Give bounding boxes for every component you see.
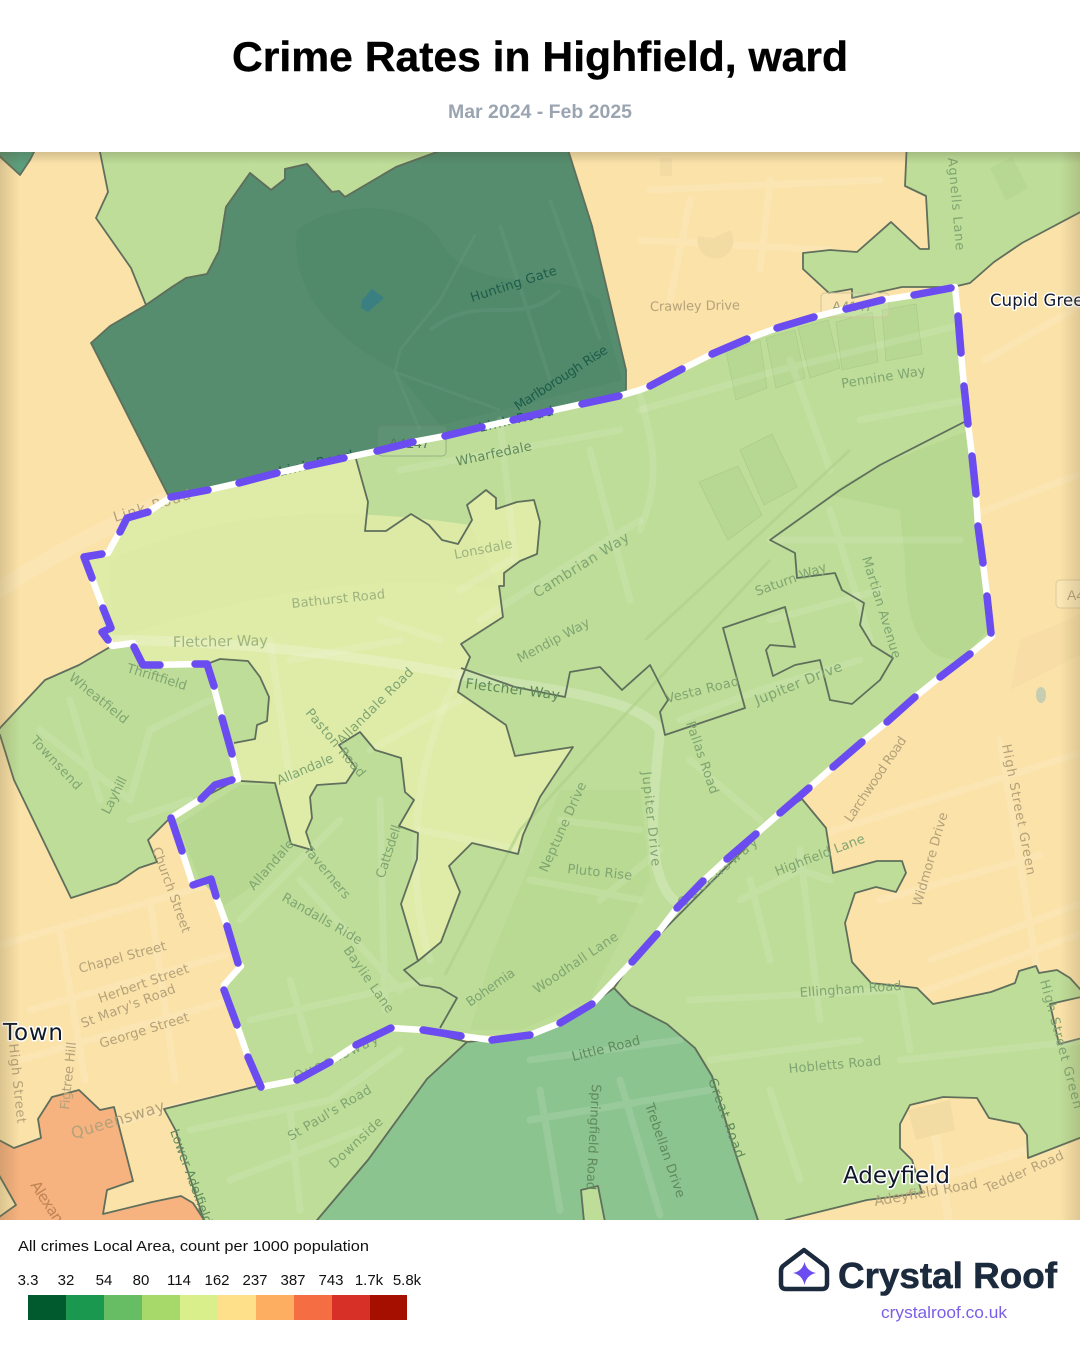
label: Pallas Road: Pallas Road [682,719,721,796]
pale section: north shade [366,514,468,543]
road shield: A4147 west [378,426,446,456]
label: Larchwood Road: Larchwood Road [842,734,910,825]
label: Link Road mid: Link Road [278,448,355,480]
label: Figtree Hill: Figtree Hill [58,1041,80,1110]
label: Allandale Road: Allandale Road [334,665,417,748]
label: Agnells Lane: Agnells Lane [944,157,967,251]
label: Ellingham Road: Ellingham Road [799,979,902,1001]
label: Chapel Street: Chapel Street [77,939,168,977]
label: Neptune Drive: Neptune Drive [537,780,590,875]
region: tan box east [1050,995,1080,1044]
label: Downside: Downside [326,1115,386,1172]
subtitle: date range: Mar 2024 - Feb 2025 [448,102,632,123]
legend value labels: 32 [58,1272,74,1289]
park inside dark green [296,208,622,425]
water: east pond [1036,687,1046,703]
label: Great Road: Great Road [704,1076,747,1160]
label: Hunting Gate: Hunting Gate [469,264,559,306]
label: Alexandra: Alexandra [27,1177,80,1246]
legend value labels: 237 [242,1272,268,1289]
label: Paston Road: Paston Road [302,706,368,781]
label: Townsend: Townsend [26,733,84,793]
label: Queensway west: Queensway [69,1096,167,1143]
label: Springfield Road: Springfield Road [582,1084,603,1190]
label: Pennine Way: Pennine Way [840,364,927,392]
road shield: A4147 east: A4147 [832,298,873,314]
label: St Mary's Road: St Mary's Road [79,982,178,1032]
label: Herbert Street: Herbert Street [96,962,191,1007]
ward: sports pitches [699,304,922,540]
label: Wheatfield: Wheatfield [65,670,131,727]
ward: darker green parks [178,430,988,1030]
label: Mendip Way: Mendip Way [515,616,593,667]
label: Martian Avenue: Martian Avenue [858,555,904,661]
legend value labels: 387 [280,1272,306,1289]
water: pond [361,289,384,312]
label: Link Road west: Link Road [111,487,193,526]
ward boundary: white line [84,287,992,1087]
region: west Wheatfield green [0,643,238,898]
label: Vesta Road: Vesta Road [664,674,741,707]
region: south-west green [164,1028,467,1232]
region: north light green [95,152,434,305]
road network on green [40,325,1080,1215]
legend value labels: 162 [204,1272,230,1289]
label: St Paul's Road: St Paul's Road [285,1083,374,1144]
label: Lonsdale: Lonsdale [453,537,514,563]
label: Bathurst Road: Bathurst Road [291,587,386,612]
label: Saturn Way: Saturn Way [753,560,829,600]
label: Highfield Lane: Highfield Lane [773,832,867,880]
region: small tan pocket in town [0,1175,17,1218]
region: south mid green [307,988,762,1232]
region: north dark green [91,140,626,497]
logo url: crystalroof.co.uk [881,1304,1008,1322]
legend value labels [18,1272,422,1289]
tan area roads [0,180,1080,1230]
label: Church Street: Church Street [148,845,193,935]
title: Crime Rates in Highfield, ward [232,33,848,80]
label: Hobletts Road: Hobletts Road [788,1054,882,1077]
label: Widmore Drive: Widmore Drive [910,811,952,908]
legend value labels: 3.3 [18,1272,38,1289]
dark green paths [395,200,600,430]
legend value labels: 1.7k [355,1272,384,1289]
legend colour scale [28,1295,407,1320]
label: Randalls Ride: Randalls Ride [279,890,364,948]
label: Tedder Road: Tedder Road [982,1148,1066,1197]
north-east pitch [990,157,1028,201]
label: Crawley Drive: Crawley Drive [650,298,740,315]
road shield: A41 right edge [1056,580,1080,608]
region: small light pocket [580,1185,606,1220]
map background: tan area [0,152,1080,1220]
label: Adeyfield Road: Adeyfield Road [873,1176,979,1210]
tan area buildings [698,240,940,1136]
legend title: All crimes Local Area, count per 1000 population [18,1238,369,1255]
map vignette [0,152,1080,1220]
label: Pluto Rise: Pluto Rise [567,862,633,884]
legend value labels: 54 [96,1272,112,1289]
label: Lower Adelfield: Lower Adelfield [166,1127,215,1226]
label: Link Road east: Link Road [478,404,555,436]
label: Woodhall Lane: Woodhall Lane [531,930,621,997]
legend value labels: 5.8k [393,1272,422,1289]
label: High Street Green north: High Street Green [998,743,1038,876]
place label: Adeyfield: Adeyfield [843,1163,950,1189]
label: Jupiter Drive north: Jupiter Drive [752,659,845,709]
legend value labels: 80 [133,1272,149,1289]
label: Wharfedale: Wharfedale [455,439,533,470]
legend value labels: 114 [167,1272,191,1289]
logo: Crystal Roof [781,1250,1058,1322]
railway strip [445,450,850,975]
label: Baylie Lane: Baylie Lane [340,944,397,1016]
label: Queensway south: Queensway [291,1032,381,1085]
region: north-east green [803,140,1080,298]
label: Allandale lower: Allandale [246,837,298,894]
label: Little Road: Little Road [570,1033,642,1065]
legend value labels: 743 [318,1272,344,1289]
label: Cambrian Way: Cambrian Way [531,530,632,601]
label: Fletcher Way east: Fletcher Way [465,676,561,704]
region: Highfield pale section [84,459,573,961]
label: Fletcher Way west: Fletcher Way [173,633,268,651]
road shield: A4147 east [821,293,889,317]
place label: Town: Town [2,1020,63,1046]
label: Marlborough Rise: Marlborough Rise [512,343,611,414]
label: Taverners: Taverners [299,842,353,903]
road shield: A4147 west: A4147 [389,435,430,451]
region: ward surrounding green [84,287,992,1087]
label: Thriftfield: Thriftfield [124,661,189,694]
label: Cattsdell: Cattsdell [374,823,405,880]
region: town orange [0,1089,206,1220]
label: George Street: George Street [98,1010,191,1052]
region: top-left small teal [0,152,35,176]
legend [18,1238,422,1320]
label: Queensway east: Queensway [675,835,761,911]
label: Layhill: Layhill [99,774,131,817]
label: High Street west: High Street [5,1043,28,1124]
internal boundary outlines [207,420,968,1028]
label: Bohemia: Bohemia [464,966,518,1010]
region: east Highfield Lane green [614,799,1080,1232]
logo wordmark: Crystal Roof [838,1255,1058,1296]
label: Jupiter Drive south: Jupiter Drive [638,770,663,867]
label: Allandale pale: Allandale [275,751,336,789]
ward boundary: purple dashes [84,288,991,1087]
icon: house with star [781,1250,827,1289]
label: Trebellan Drive: Trebellan Drive [641,1100,688,1200]
